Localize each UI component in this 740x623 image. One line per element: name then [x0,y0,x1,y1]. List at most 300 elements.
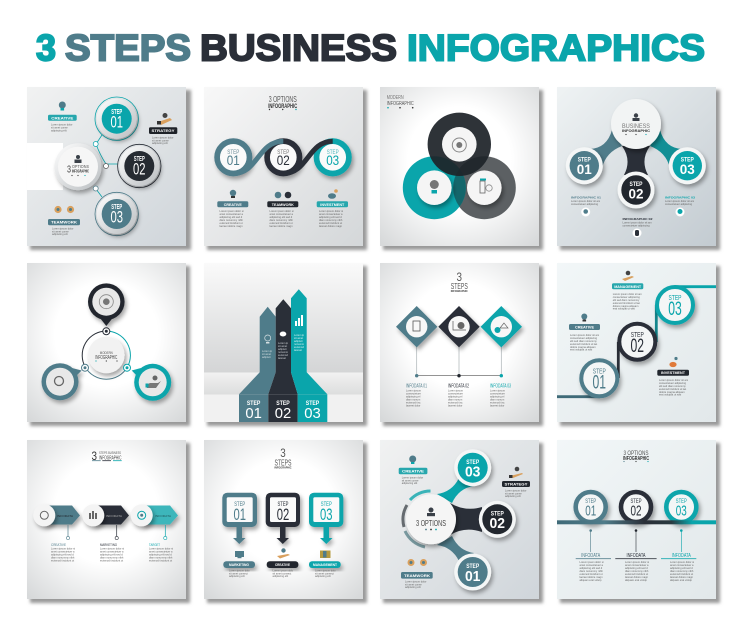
infodata 01 [406,384,427,408]
strategy label [149,113,177,145]
panel: diamonds timeline [380,263,543,426]
step 01 ring [581,360,617,396]
step 03: 03 [680,161,695,177]
top white disc with target icon [442,127,477,162]
infodata column 02: aliquam erat volutp [625,578,647,582]
panel heading: STEPS [274,458,292,468]
tag 01: CREATIVE [51,543,67,547]
creative label: Lorem ipsum dolor sit am [570,333,599,337]
management label: dolore magna aliquam [613,304,638,308]
panel heading [268,94,297,110]
step 01 [566,147,603,184]
teamwork label: Lorem ipsum dolor [52,226,74,230]
infodata 03 [490,384,511,408]
strategy label: STRATEGY [152,128,175,133]
creative label [48,102,77,132]
infodata 03: adipiscing el [490,394,505,398]
column: teamwork: diam nonummy nibh [270,218,293,222]
centre disc [88,337,125,373]
teamwork label: adipiscing elit [405,585,421,589]
strategy label: adipiscing elit [152,141,168,145]
management label: MANAGEMENT [614,284,642,289]
tag 03: amet consectetuer a [149,550,173,554]
tag 03: TARGET [149,543,160,547]
strategy label [502,467,530,498]
infodata column 03: Lorem ipsum dolor si [670,560,694,564]
tag 02: euismod tincidunt ut [100,558,123,562]
panel heading [623,450,649,462]
infographic 01 note: consectetuer adipiscing [571,202,599,206]
strategy label: sit amet conse [152,138,169,142]
column: creative: Lorem ipsum dolor si [220,209,244,213]
infodata column 03: INFODATA [672,553,691,559]
infodata column 02 [615,529,657,582]
step 02 circle [118,144,161,188]
square 01: STEP [234,501,245,508]
venn circles [403,113,516,219]
square 01: 01 [233,505,246,524]
column: investment [317,189,348,228]
panel heading: INFOGRAPHIC [99,456,122,462]
step 03 ring [657,287,693,323]
arrow 03: laoreet [294,348,302,352]
step 03: 03 [465,464,480,480]
infodata 02 [448,384,469,408]
panel: ring timeline [557,440,720,603]
ring 03 [666,492,696,522]
management label: sit amet consect [315,572,334,576]
step 02 ring: STEP [277,149,289,156]
investment label: euismod tincidunt ut lao [659,387,687,391]
arrow 02: laoreet [278,356,286,360]
creative label: Lorem ipsum dolor [51,122,73,126]
square 02: 02 [277,505,289,524]
creative label [569,314,600,352]
management label: Lorem ipsum dolor sit am [613,292,642,296]
square 02 [266,493,300,544]
arrow 01: adipisci [262,355,271,359]
panel: rounded square pins [204,440,367,603]
infodata column 02: euismod tincidunt ut [625,572,648,576]
infographic 03 note [665,196,695,216]
infodata column 01: adipiscing elit sed d [580,566,603,570]
step 03 ring: STEP [327,149,339,156]
hub circle: INFOGRAPHIC [622,129,651,133]
creative label [267,548,298,578]
step 02: STEP [630,181,643,188]
column: creative: adipiscing elit sed d [220,215,243,219]
creative label: sit amet conse [51,126,68,130]
panel: overlapping circles [380,87,543,250]
step 03 [669,147,706,184]
infodata column 01 [576,529,611,582]
panel: business hub with three steps [557,87,720,250]
ring 01 [576,492,606,522]
column: teamwork [267,192,298,228]
panel: three arrows [204,263,367,426]
panel heading: 3 OPTIONS [269,94,297,104]
tag 02: MARKETING [100,543,117,547]
teamwork label: sit amet conse [52,230,69,234]
step 02 ring [267,141,299,174]
ring 01: STEP [585,499,596,505]
marketing label: MARKETING [229,562,249,567]
step 02: 02 [628,186,644,202]
teamwork label: Lorem ipsum dolor [405,580,427,584]
infographic 03 note: consectetuer adipiscing [665,202,693,206]
infodata column 03: adipiscing elit sed d [670,566,693,570]
S-curve bands [233,141,333,174]
step 02 ring: 02 [277,153,290,168]
step 03 circle: 03 [110,208,123,226]
panel heading: INFOGRAPHIC [387,101,414,107]
management label [309,550,341,578]
tag 03: Lorem ipsum dolor si [149,546,173,550]
infodata column 01: laoreet dolore magn [580,575,603,579]
infodata 01: diam nonum [406,398,420,402]
arrow 02: adipisci [278,347,287,351]
step 01: 01 [465,569,480,585]
infographic 01 note: INFOGRAPHIC 01 [571,196,601,200]
teamwork label: TEAMWORK [51,220,77,225]
investment label: INVESTMENT [661,370,686,375]
infodata 01: Lorem ipsum [406,388,421,392]
arrow 02 [268,299,298,422]
step 02: 02 [490,516,505,532]
creative label: adipiscing elit [272,574,288,578]
strategy label: adipiscing elit [505,494,521,498]
teamwork label: TEAMWORK [404,573,430,578]
investment label: elit sed diam nonummy [659,384,686,388]
step 03 circle [95,192,138,236]
creative label: dolore magna aliquam [570,345,596,349]
panel heading: 3 [457,270,462,284]
column: investment: adipiscing elit sed d [319,215,342,219]
infodata column 01: INFODATA [581,553,600,559]
panel heading: STEPS BUSINESS [99,450,121,455]
left pin [42,363,82,400]
infodata column 02: laoreet dolore magn [625,575,649,579]
infodata 02: euismod tinc [448,400,463,404]
step 02 circle: 02 [133,160,146,178]
column: teamwork: TEAMWORK [272,202,294,207]
arrow 03: nonumm [294,343,304,346]
step 01: 01 [577,161,592,177]
creative label: sit amet conse [402,478,419,482]
panel: staircase rings [557,263,720,426]
panel heading: STEPS [451,282,468,291]
tag 03: INFODATA [155,514,171,518]
arrow 02: sit amet [278,344,287,348]
central hub: 3 [67,164,71,176]
panel: S-curve rings [204,87,367,250]
creative label: elit sed diam nonummy [570,339,597,343]
hub circle [406,494,456,544]
panel: radial steps with central hub [27,87,191,250]
management label: erat volutpat ut wisi [613,306,635,310]
square 02: STEP [278,501,288,508]
creative label: Lorem ipsum dolo [272,568,294,572]
infodata 02: laoreet dolor [448,404,463,408]
ring 02: 02 [630,502,642,520]
step 01 ring: STEP [593,366,606,376]
management label: MANAGEMENT [313,562,337,567]
infodata column 02: adipiscing elit sed d [625,566,648,570]
infodata column 02: amet consectetuer a [625,563,649,567]
centre disc: INFOGRAPHIC [95,355,118,361]
step 01: STEP [466,563,480,570]
column: creative: CREATIVE [224,202,242,207]
infographic 02 note: consectetuer adipiscing [622,224,650,228]
infodata 02: consectetuer [448,392,463,396]
infodata column 02: INFODATA [626,553,646,559]
arrow 03: adipisci [294,339,303,343]
infodata column 02: Lorem ipsum dolor si [625,560,649,564]
step 01 ring [217,141,250,174]
panel: hub with arcs [380,440,543,603]
horizontal band [557,520,716,524]
column: creative: laoreet dolore magn [220,224,243,228]
panel heading: INFOGRAPHIC [274,466,292,470]
column: investment: laoreet dolore magn [319,224,343,228]
tag 03 [131,504,178,562]
teamwork label: adipiscing elit [52,232,68,236]
creative label: euismod tincidunt ut lao [570,342,598,346]
infodata 01: adipiscing el [406,394,421,398]
infodata 03: diam nonum [490,398,504,402]
arrow 01: sit amet [262,352,271,356]
ring 02 [621,492,651,522]
step 02 ring: 02 [631,336,644,357]
title: 3 [36,28,56,68]
tag 02: Lorem ipsum dolor si [100,546,124,550]
step 02 ring [619,324,655,360]
step 03 [454,449,491,486]
column: investment: euismod tincidunt ut [319,221,342,225]
step 02 circle: STEP [134,156,145,163]
infographic 01 note [571,196,601,216]
step 01 circle: STEP [111,109,122,116]
panel heading: INFOGRAPHIC [451,289,468,293]
arrow 02: STEP [276,400,290,407]
panel: pins around ring [27,263,190,426]
arrow 03: Lorem ip [294,333,305,337]
column: creative: diam nonummy nibh [220,218,243,222]
tag 03: euismod tincidunt ut [149,558,172,562]
arrow 03: euismod [294,345,304,349]
step 01 [454,554,491,590]
square 03 [309,493,343,544]
infodata 01: euismod tinc [406,400,421,404]
arrow 02: nonumm [278,351,288,354]
panel heading: 3 [280,446,286,460]
connector nodes [93,142,108,191]
infographic 03 note: INFOGRAPHIC 03 [665,196,695,200]
step 03: STEP [466,459,480,466]
strategy label: Lorem ipsum dolor [505,488,527,492]
infodata column 01: aliquam erat volutp [580,578,602,582]
tag 03: diam nonummy nibh [149,556,173,560]
central hub: OPTIONS [72,164,89,169]
top pin [88,283,125,326]
title: STEPS [65,28,191,68]
column: investment: INVESTMENT [320,202,345,207]
teamwork label [48,206,80,236]
step 03 circle: STEP [111,204,122,211]
centre disc: MODERN [100,350,113,355]
step 02 [618,172,654,208]
diamond 02 [438,306,480,377]
panel heading [274,446,292,470]
infodata 02: INFODATA 02 [448,384,469,390]
infodata 02: Lorem ipsum [448,388,463,392]
panel heading: INFOGRAPHIC [623,456,649,462]
infographic 01 note: Lorem ipsum dolor sit am [571,199,600,203]
management label: adipiscing elit [315,574,331,578]
investment label: Lorem ipsum dolor sit am [659,378,688,382]
marketing label [223,551,255,578]
infodata column 01: euismod tincidunt ut [580,572,603,576]
panel heading [92,449,122,463]
infodata column 01: Lorem ipsum dolor si [580,560,604,564]
column: creative [217,190,248,228]
connectors [590,130,682,175]
investment label: dolore magna aliquam [659,390,685,394]
arrow 01 [239,307,276,422]
infodata 03: INFODATA 03 [490,384,511,390]
infographic 03 note: Lorem ipsum dolor sit am [665,199,694,203]
step 02 ring: STEP [631,330,644,339]
title: INFOGRAPHICS [407,28,705,68]
column: investment: Lorem ipsum dolor si [319,209,343,213]
teamwork label: sit amet conse [405,582,422,586]
management label: consectetuer adipiscing [613,295,640,299]
right pin [132,364,171,401]
column: teamwork: laoreet dolore magn [270,224,293,228]
tag 02: diam nonummy nibh [100,556,124,560]
panel heading: 3 [92,449,97,463]
management label: Lorem ipsum dolo [315,568,336,572]
panel heading: MODERN [387,95,404,101]
step 03 ring: 03 [668,299,682,320]
step 01 circle: 01 [110,112,123,132]
infodata 03: laoreet dolor [490,404,505,408]
path lines [557,287,716,397]
hub circle: 3 OPTIONS [416,519,446,528]
arrow 02: 02 [275,405,291,422]
timeline lines [417,345,501,376]
infodata column 01: diam nonummy nibh [580,569,603,573]
ring 01: 01 [585,502,596,520]
infodata 03: Lorem ipsum [490,388,505,392]
arrow 03: 03 [304,405,321,422]
right white disc with document icon [467,170,502,205]
arrow 02: euismod [278,353,288,357]
arrow 03: sit amet [294,336,303,340]
infodata 01: INFODATA 01 [406,384,427,390]
tag 03: adipiscing elit sed d [149,552,172,556]
infodata column 03: diam nonummy nibh [670,569,694,573]
step 01 ring: 01 [227,153,240,168]
marketing label: Lorem ipsum dolo [229,568,250,572]
arrow 01: 01 [245,405,262,422]
column: investment: amet consectetuer a [319,212,343,216]
panel: arrow tags [27,440,190,603]
step 01 circle [95,97,138,140]
creative label: CREATIVE [575,324,594,330]
step 01 ring: 01 [593,372,606,394]
tag 01: adipiscing elit sed d [51,552,74,556]
column: teamwork: Lorem ipsum dolor si [270,209,294,213]
step 01: STEP [578,156,591,164]
creative label: CREATIVE [402,468,424,474]
diamond 03 [481,306,522,377]
creative label: CREATIVE [275,562,290,567]
creative label: CREATIVE [51,115,74,120]
management label: euismod tincidunt ut lao [613,301,641,305]
strategy label: STRATEGY [504,482,528,486]
outer arcs [403,491,430,547]
tag 01 [33,504,80,562]
tag 01: INFODATA [57,514,73,518]
column: teamwork: euismod tincidunt ut [270,221,293,225]
creative label: consectetuer adipiscing [570,336,598,340]
square 01 [222,493,257,544]
panel heading [451,270,468,293]
column: creative: amet consectetuer a [220,212,244,216]
infographic 02 note: Lorem ipsum dolor sit am [622,220,652,224]
diamond 01 [396,306,437,377]
tag 02: adipiscing elit sed d [100,552,123,556]
infodata column 03: euismod tincidunt ut [670,572,693,576]
square 03: STEP [321,501,332,508]
column: creative: euismod tincidunt ut [220,221,243,225]
arrow 01: STEP [247,400,261,407]
ring nodes [82,328,130,371]
infodata 03: consectetuer [490,392,505,396]
column: investment: diam nonummy nibh [319,218,343,222]
arrow 01: Lorem ip [262,349,273,353]
panel heading [387,95,414,108]
hub circle: BUSINESS [622,123,651,130]
investment label: consectetuer adipiscing [659,381,687,385]
step 03 ring: STEP [668,293,682,302]
creative label: adipiscing elit [51,128,67,132]
creative label [399,456,427,485]
teamwork label [401,559,433,589]
square 03: 03 [320,505,333,524]
tag 01: euismod tincidunt ut [51,558,74,562]
tag 02: amet consectetuer a [100,550,124,554]
connectors [437,478,482,561]
central hub [54,143,102,190]
column: teamwork: adipiscing elit sed d [270,215,293,219]
infodata column 03: laoreet dolore magn [670,575,694,579]
arrow 03: STEP [306,400,320,407]
infodata 01: laoreet dolor [406,404,421,408]
step 03 ring: 03 [326,153,339,168]
infodata 01: consectetuer [406,392,421,396]
panel heading: INFOGRAPHIC [268,103,297,110]
strategy label: Lorem ipsum dolor [152,136,174,140]
tag 01: diam nonummy nibh [51,556,75,560]
investment label [657,357,689,396]
step 02 [479,501,516,538]
strategy label: sit amet conse [505,492,522,496]
tag 02: INFODATA [106,514,122,518]
panel heading: 3 OPTIONS [624,450,649,457]
infodata column 03: aliquam erat volutp [670,578,692,582]
